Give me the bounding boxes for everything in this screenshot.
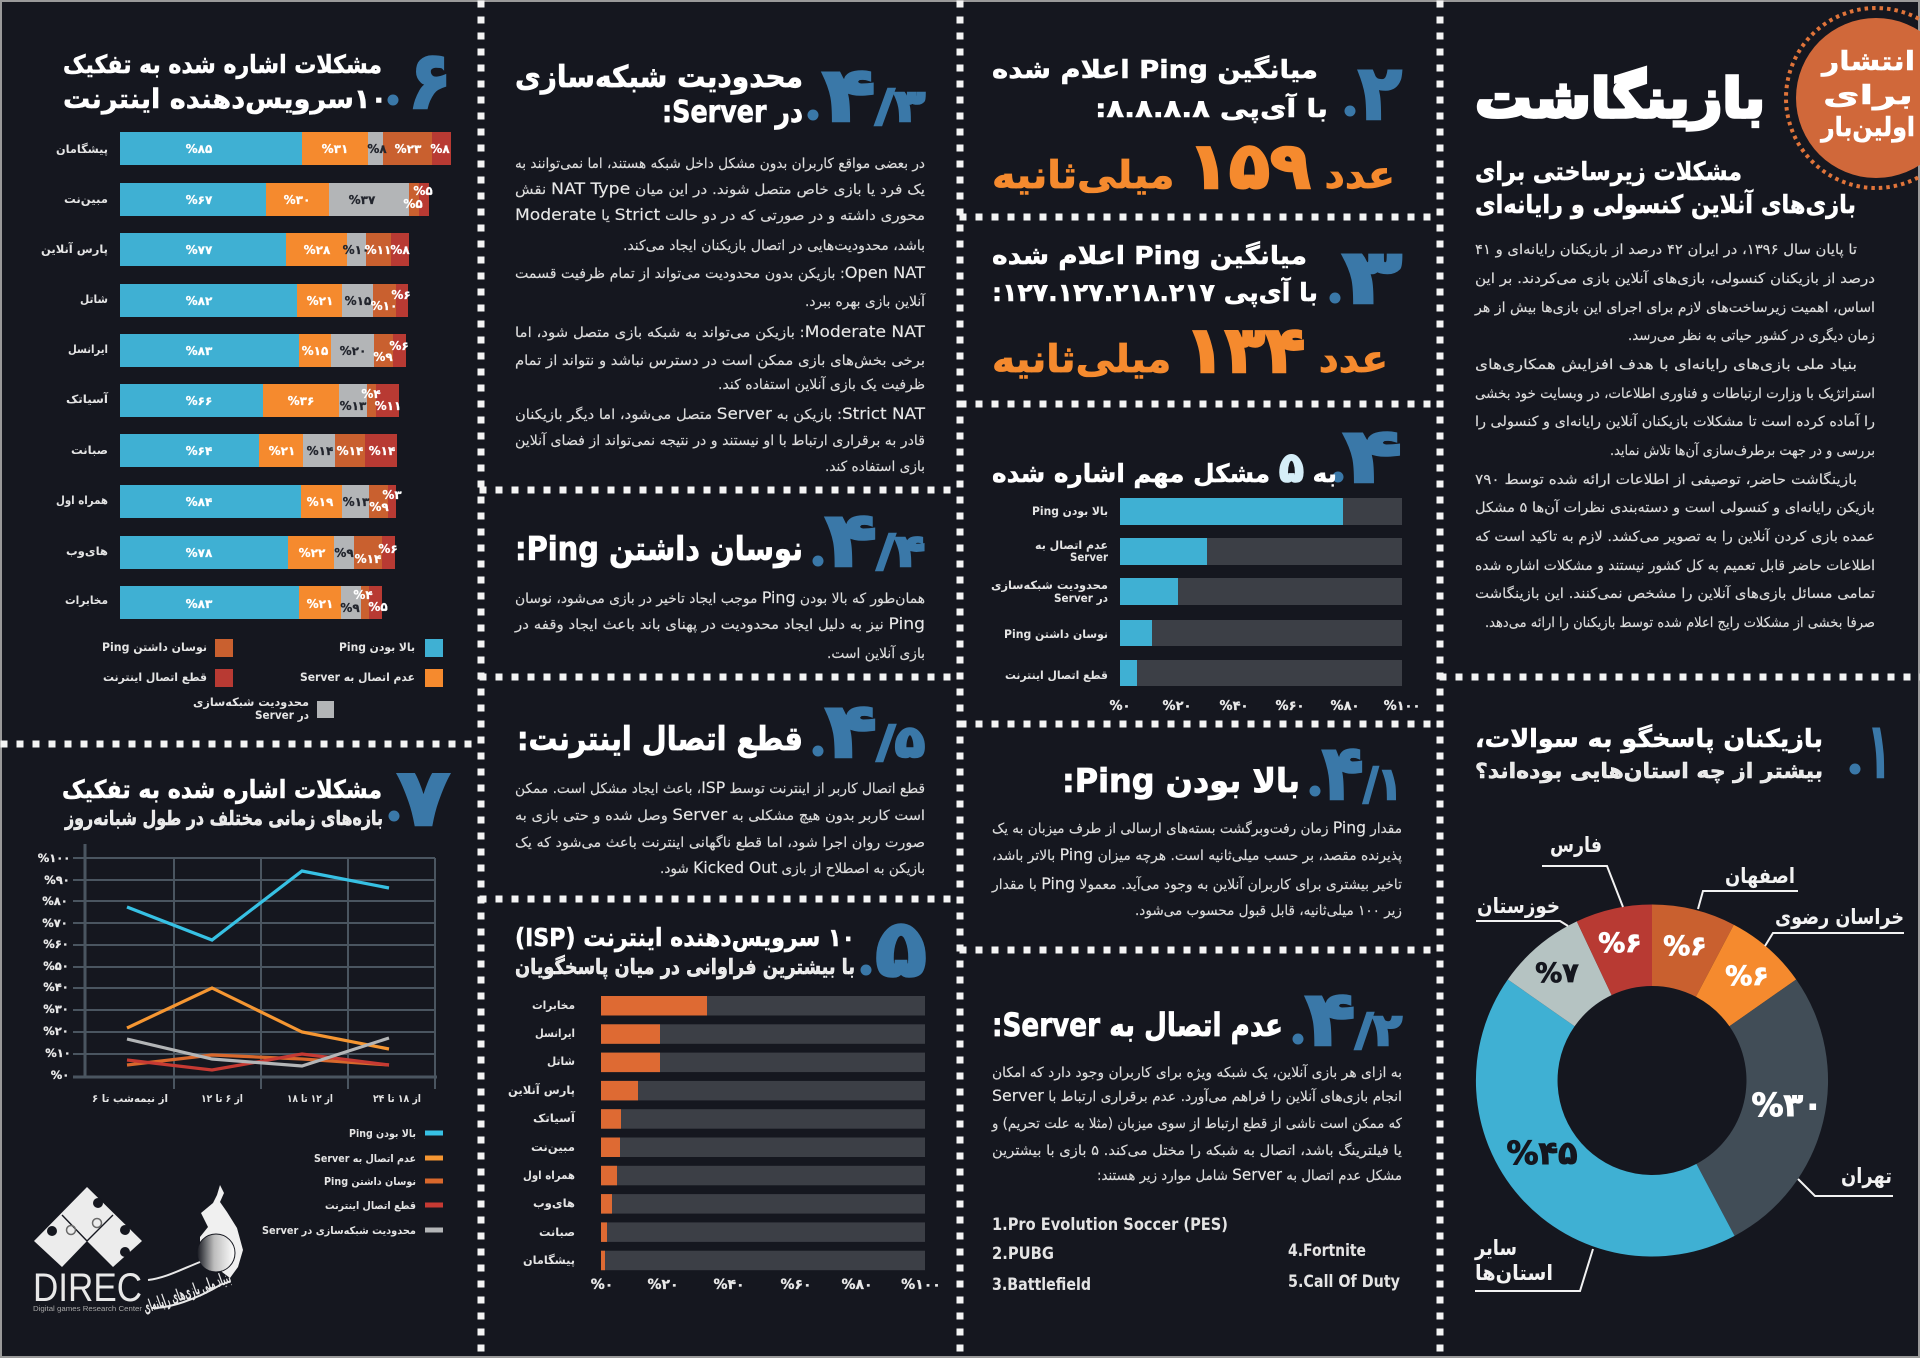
intro text bbox=[1474, 242, 1875, 631]
stacked bar chart: %۲۰ bbox=[340, 344, 366, 358]
stacked bar chart: %۶ bbox=[391, 288, 411, 302]
bar chart: five problems: %۲۰ bbox=[1163, 699, 1191, 714]
text 4.3 bbox=[515, 156, 926, 475]
text 4.2: که ممکن است ناشی از قطع ارتباط از سوی میزبان (مثلا به علت تحریم) و bbox=[991, 1116, 1402, 1132]
stacked bar chart: آسیاتک bbox=[66, 392, 109, 406]
bar chart: ISPs: %۱۰۰ bbox=[901, 1277, 941, 1293]
stacked bar chart: ایرانسل bbox=[68, 342, 108, 356]
stacked bar chart: مبین‌نت bbox=[64, 192, 108, 206]
number 4.5: ۴/۵ bbox=[825, 686, 925, 775]
text 4.5: قطع اتصال کاربر از اینترنت توسط ISP، باعث ایجاد مشکل است. ممکن bbox=[515, 778, 925, 797]
line chart: %۱۰ bbox=[45, 1046, 71, 1060]
intro text: استراتژیک با وزارت ارتباطات و فناوری اطلاعات، در وبسایت خود بخشی bbox=[1475, 386, 1875, 402]
panel: intro bbox=[1474, 8, 1920, 631]
stacked bar chart: مخابرات bbox=[65, 593, 108, 607]
panel: section 7 problems by time bbox=[33, 751, 450, 1318]
stacked bar chart: صبانت bbox=[71, 443, 108, 457]
legend: stacked bars: نوسان داشتن Ping bbox=[102, 640, 207, 655]
heading 6 bbox=[63, 50, 387, 115]
heading 1 bbox=[1475, 724, 1823, 783]
text 4.3: در بعضی مواقع کاربران بدون مشکل داخل شبکه هستند، اما نمی‌توانند به bbox=[515, 156, 925, 172]
label: Tehran: تهران bbox=[1841, 1164, 1892, 1188]
intro text: بازیکن رایانه‌ای و کنسولی است و دسته‌بندی نظرات آن‌ها ۵ مشکل bbox=[1475, 499, 1875, 516]
text 4.1: مقدار Ping زمان رفت‌وبرگشت بسته‌های ارسالی از طرف میزبان به یک bbox=[992, 818, 1402, 837]
bar chart: ISPs: پیشگامان bbox=[523, 1253, 575, 1267]
text 4.4: بازی آنلاین است. bbox=[827, 645, 925, 662]
subtitle: بازی‌های آنلاین کنسولی و رایانه‌ای bbox=[1475, 189, 1856, 220]
stacked bar chart: پارس آنلاین bbox=[41, 242, 108, 256]
donut chart: %۶ bbox=[1663, 931, 1707, 962]
stacked bar chart: پیشگامان bbox=[56, 142, 108, 156]
stacked bar chart: %۱۴ bbox=[369, 444, 395, 458]
label: other provinces: استان‌ها bbox=[1475, 1261, 1553, 1285]
donut chart: %۶ bbox=[1725, 961, 1769, 992]
stacked bar chart: %۱۹ bbox=[307, 495, 334, 509]
panel: section 1 provinces: ۱ bbox=[1868, 706, 1890, 795]
intro text: بازینگاشت حاضر، توصیفی از اطلاعات ارائه شده توسط ۷۹۰ bbox=[1475, 471, 1857, 488]
bar chart: five problems: %۰ bbox=[1110, 699, 1130, 714]
stacked bar chart: %۹ bbox=[334, 546, 354, 560]
panel: section 3 ping bbox=[992, 232, 1402, 388]
bar chart: five problems: Server bbox=[1070, 550, 1108, 564]
stacked bar chart: %۷۷ bbox=[186, 243, 213, 257]
text 4.3: ظرفیت یک بازی آنلاین استفاده کند. bbox=[718, 376, 925, 393]
panel: section 6 problems by ISP bbox=[41, 34, 452, 722]
number 4 bbox=[1332, 411, 1402, 500]
legend: stacked bars: محدودیت شبکه‌سازی bbox=[193, 695, 309, 710]
bar chart: ISPs bbox=[508, 996, 941, 1293]
intro text: تا پایان سال ۱۳۹۶، در ایران ۴۲ درصد از بازیکنان رایانه‌ای و ۴۱ bbox=[1475, 242, 1857, 258]
bar chart: ISPs: های‌وب bbox=[533, 1196, 575, 1211]
stacked bar chart: همراه اول bbox=[56, 493, 108, 508]
bar chart: five problems: نوسان داشتن Ping bbox=[1004, 627, 1108, 642]
text 4.2: انجام بازی‌های آنلاین را فراهم می‌آورد. عدم برقراری ارتباط با Server bbox=[992, 1086, 1402, 1105]
stacked bar chart: %۱۱ bbox=[365, 243, 391, 257]
label: Isfahan: اصفهان bbox=[1725, 864, 1795, 888]
stacked bar chart: %۱۴ bbox=[337, 444, 363, 458]
bar chart: five problems: قطع اتصال اینترنت bbox=[1005, 668, 1108, 682]
bar chart: ISPs: %۸۰ bbox=[841, 1277, 873, 1293]
text 4.5: بازیکن به اصطلاح از بازی Kicked Out شود. bbox=[660, 858, 925, 877]
stacked bar chart: %۳۶ bbox=[288, 394, 314, 408]
text 4.2: یا فیلترینگ باشد، اتصال به شبکه را مختل می‌کند. ۵ بازی با بیشترین bbox=[992, 1142, 1402, 1159]
number 4: ۴ bbox=[1343, 411, 1402, 500]
donut chart: %۷ bbox=[1535, 958, 1579, 989]
stacked bar chart: %۲۲ bbox=[299, 546, 326, 560]
heading 2 bbox=[992, 55, 1328, 123]
bar chart: ISPs: مبین‌نت bbox=[531, 1140, 575, 1154]
bar chart: five problems: %۱۰۰ bbox=[1384, 699, 1420, 714]
text 4.3: یک فرد یا بازی خاص متصل شوند. در این میان NAT Type نقش bbox=[515, 179, 925, 198]
legend: line chart: قطع اتصال اینترنت bbox=[325, 1200, 416, 1212]
badge: first publication bbox=[1786, 8, 1920, 188]
stacked bar chart: %۶ bbox=[378, 542, 398, 556]
bar chart: ISPs: پارس آنلاین bbox=[508, 1083, 575, 1097]
text 4.1 bbox=[991, 818, 1402, 919]
panel: section 4 problems bbox=[991, 411, 1420, 714]
panel: section 1 provinces bbox=[1474, 706, 1904, 1291]
bar chart: ISPs: صبانت bbox=[539, 1225, 575, 1239]
heading 7: مشکلات اشاره شده به تفکیک bbox=[62, 775, 382, 804]
stacked bar chart: %۶۷ bbox=[186, 193, 213, 207]
intro text: اساس، اهمیت زیرساخت‌های لازم برای اجرای این بازی‌ها بیش از هر bbox=[1474, 300, 1875, 316]
line chart: از نیمه‌شب تا ۶ bbox=[92, 1093, 168, 1105]
stacked bar chart: %۲۱ bbox=[307, 597, 333, 611]
title: بازینگاشت bbox=[1475, 67, 1765, 130]
stacked bar chart: %۴ bbox=[353, 588, 373, 602]
legend: line chart: محدودیت شبکه‌سازی در Server bbox=[262, 1225, 416, 1237]
stacked bar chart bbox=[41, 132, 451, 619]
number 4.2: ۴/۲ bbox=[1305, 974, 1402, 1063]
text 4.5: است کاربر بدون هیچ مشکلی به Server وصل شده و حتی بازی به bbox=[515, 805, 925, 824]
legend: stacked bars: در Server bbox=[255, 708, 309, 722]
stacked bar chart: %۸ bbox=[367, 142, 387, 156]
text 4.2: به ازای هر بازی آنلاین، یک شبکه ویژه برای کاربران وجود دارد که امکان bbox=[992, 1064, 1402, 1081]
intro text: اطلاعات حاضر قابل تعمیم به کل کشور نیستند و مشکلات اشاره شده bbox=[1475, 558, 1875, 574]
text 4.5: صورت روان اجرا شود، اما قطع ناگهانی اینترنت باعث می‌شود که یک bbox=[515, 834, 925, 851]
label: Fars: فارس bbox=[1550, 833, 1602, 857]
legend: stacked bars: بالا بودن Ping bbox=[339, 640, 415, 655]
stacked bar chart: %۱۴ bbox=[307, 444, 333, 458]
legend: stacked bars bbox=[102, 639, 443, 722]
legend: line chart: بالا بودن Ping bbox=[349, 1128, 416, 1140]
intro text: عمده بازی کردن آنلاین را به تصویر می‌کشد. لازم به تاکید است که bbox=[1475, 528, 1875, 545]
bar chart: five problems: در Server bbox=[1054, 591, 1108, 605]
donut chart bbox=[1476, 904, 1828, 1257]
label: Khuzestan: خوزستان bbox=[1477, 894, 1560, 918]
heading 5: با بیشترین فراوانی در میان پاسخگویان bbox=[515, 954, 855, 979]
heading 5 bbox=[515, 923, 855, 979]
bar chart: ISPs: مخابرات bbox=[532, 998, 575, 1012]
badge: first publication: انتشار bbox=[1820, 47, 1915, 77]
text 4.1: پذیرنده مقصد، بر حسب میلی‌ثانیه است. هرچه میزان Ping بالاتر باشد، bbox=[992, 845, 1402, 864]
game list bbox=[992, 1215, 1400, 1294]
bar chart: five problems: %۸۰ bbox=[1331, 699, 1359, 714]
game list: 4.Fortnite bbox=[1288, 1241, 1366, 1260]
stacked bar chart: %۶ bbox=[389, 339, 409, 353]
stacked bar chart: %۷۸ bbox=[186, 546, 213, 560]
text 4.3: قادر به برقراری ارتباط با او نیستند و در نتیجه نمی‌تواند از فضای آنلاین bbox=[515, 432, 925, 449]
stacked bar chart: %۳ bbox=[382, 488, 402, 502]
line chart: از ۱۲ تا ۱۸ bbox=[287, 1093, 333, 1105]
stacked bar chart: %۵ bbox=[368, 600, 388, 614]
stacked bar chart: %۲۱ bbox=[269, 444, 295, 458]
line chart: %۴۰ bbox=[43, 980, 69, 994]
stacked bar chart: %۶۶ bbox=[186, 394, 212, 408]
heading 4.1: بالا بودن Ping: bbox=[1062, 761, 1300, 801]
stacked bar chart: %۴ bbox=[361, 387, 381, 401]
text 4.3: Moderate NAT: بازیکن می‌تواند به شبکه بازی متصل شود، اما bbox=[515, 322, 925, 341]
panel: section 4.1 high ping bbox=[991, 728, 1402, 919]
panel: section 5 ISPs bbox=[508, 902, 941, 1293]
stacked bar chart: %۸ bbox=[390, 243, 410, 257]
stacked bar chart: %۱۰ bbox=[371, 299, 397, 313]
heading 7 bbox=[62, 775, 383, 830]
bar chart: ISPs: %۰ bbox=[591, 1277, 613, 1293]
stacked bar chart: %۲۱ bbox=[307, 294, 333, 308]
stacked bar chart: %۵ bbox=[413, 184, 433, 198]
intro text: درصد از بازیکنان کنسولی، بازی‌های آنلاین بازی می‌کردند. بر این bbox=[1475, 270, 1875, 287]
bar chart: five problems: بالا بودن Ping bbox=[1032, 504, 1108, 519]
stacked bar chart: %۱۳ bbox=[343, 495, 370, 509]
text 4.3: Strict NAT: بازیکن به Server متصل می‌شود، اما دیگر بازیکنان bbox=[515, 404, 925, 423]
heading 3 bbox=[992, 241, 1318, 307]
text 4.3: آنلاین بازی بهره ببرد. bbox=[805, 293, 926, 310]
stacked bar chart: %۳۱ bbox=[322, 142, 348, 156]
stacked bar chart: %۸ bbox=[430, 142, 450, 156]
line chart: %۷۰ bbox=[42, 916, 68, 930]
bar chart: five problems: %۶۰ bbox=[1276, 699, 1304, 714]
stacked bar chart: %۳۷ bbox=[349, 193, 376, 207]
subtitle bbox=[1475, 157, 1856, 220]
stacked bar chart: %۱۱ bbox=[375, 399, 401, 413]
heading 3: میانگین Ping اعلام شده bbox=[992, 241, 1307, 271]
game list: 1.Pro Evolution Soccer (PES) bbox=[992, 1215, 1228, 1234]
panel: section 2 ping bbox=[992, 48, 1402, 204]
text 4.3: بازی استفاده کند. bbox=[825, 459, 925, 475]
heading 4.3: در Server: bbox=[662, 95, 803, 130]
value 159 ms: عدد ۱۵۹ میلی‌ثانیه bbox=[992, 130, 1395, 204]
number 4.4: ۴/۴ bbox=[825, 495, 925, 584]
stacked bar chart: %۹ bbox=[340, 601, 360, 615]
stacked bar chart: %۱۴ bbox=[355, 552, 381, 566]
number 3 bbox=[1330, 232, 1402, 321]
game list: 3.Battlefield bbox=[992, 1275, 1091, 1294]
panel: section 4.2 server connection bbox=[991, 974, 1402, 1294]
stacked bar chart: %۵ bbox=[403, 197, 423, 211]
bar chart: ISPs: شاتل bbox=[547, 1054, 575, 1068]
text 4.3: باشد، محدودیت‌هایی در اتصال بازیکنان ایجاد می‌کند. bbox=[623, 238, 925, 254]
panel: section 4.5 internet loss bbox=[515, 686, 925, 877]
game list: 5.Call Of Duty bbox=[1288, 1272, 1400, 1291]
line chart bbox=[38, 844, 437, 1105]
legend: line chart: عدم اتصال به Server bbox=[314, 1153, 416, 1165]
game list: 2.PUBG bbox=[992, 1244, 1054, 1263]
stacked bar chart: شاتل bbox=[80, 292, 108, 306]
heading 4.3 bbox=[515, 60, 803, 130]
bar chart: ISPs: %۴۰ bbox=[713, 1277, 745, 1293]
label: other provinces bbox=[1474, 1236, 1593, 1291]
line chart: از ۱۸ تا ۲۴ bbox=[373, 1093, 421, 1105]
stacked bar chart: %۸۳ bbox=[186, 597, 213, 611]
label: Fars bbox=[1542, 833, 1623, 907]
legend: line chart bbox=[262, 1128, 443, 1237]
donut chart: %۶ bbox=[1598, 928, 1642, 959]
number 6: ۶ bbox=[408, 34, 452, 127]
bar chart: ISPs: %۶۰ bbox=[780, 1277, 812, 1293]
bar chart: five problems: %۴۰ bbox=[1220, 699, 1248, 714]
heading 7: بازه‌های زمانی مختلف در طول شبانه‌روز bbox=[64, 806, 383, 830]
stacked bar chart: %۱۵ bbox=[345, 294, 371, 308]
line chart: %۵۰ bbox=[43, 959, 69, 973]
line chart: %۹۰ bbox=[44, 873, 70, 887]
heading 6: مشکلات اشاره شده به تفکیک bbox=[63, 50, 382, 79]
number 4.3: ۴/۳ bbox=[822, 50, 925, 139]
line chart: %۱۰۰ bbox=[38, 851, 70, 865]
heading 4.2: عدم اتصال به Server: bbox=[992, 1006, 1283, 1044]
number 2: ۲ bbox=[1358, 48, 1402, 137]
donut chart: %۴۵ bbox=[1506, 1134, 1578, 1172]
heading 2: میانگین Ping اعلام شده bbox=[992, 55, 1318, 85]
heading 4.5: قطع اتصال اینترنت: bbox=[517, 719, 803, 759]
text 4.1: زیر ۱۰۰ میلی‌ثانیه، قابل قبول محسوب می‌شود. bbox=[1135, 903, 1402, 919]
legend: stacked bars: عدم اتصال به Server bbox=[300, 670, 415, 684]
stacked bar chart: های‌وب bbox=[66, 544, 108, 559]
panel: section 4.4 ping fluctuation bbox=[514, 495, 925, 662]
bar chart: ISPs: ایرانسل bbox=[535, 1026, 575, 1040]
stacked bar chart: %۹ bbox=[373, 350, 393, 364]
stacked bar chart: %۸۳ bbox=[186, 344, 213, 358]
text 4.5 bbox=[515, 778, 925, 877]
label: Isfahan bbox=[1698, 864, 1798, 909]
value 134 ms: عدد ۱۳۴ میلی‌ثانیه bbox=[992, 314, 1388, 388]
line chart: %۰ bbox=[51, 1068, 69, 1082]
number 6 bbox=[388, 34, 452, 127]
number 3: ۳ bbox=[1342, 232, 1402, 321]
stacked bar chart: %۳۰ bbox=[284, 193, 310, 207]
intro text: زمان دیگری در کشور حیاتی به نظر می‌رسد. bbox=[1628, 327, 1875, 344]
intro text: تمامی مسائل بازی‌های آنلاین را مشخص نمی‌کنند. این بازینگاشت bbox=[1475, 585, 1875, 602]
line chart: %۲۰ bbox=[43, 1024, 69, 1038]
bar chart: ISPs: %۲۰ bbox=[647, 1277, 679, 1293]
label: Tehran bbox=[1798, 1164, 1893, 1196]
heading 4.4: نوسان داشتن Ping: bbox=[515, 529, 803, 569]
intro text: صرفا بخشی از مشکلات رایج اعلام شده توسط بازیکنان را ارائه می‌دهد. bbox=[1485, 615, 1875, 631]
stacked bar chart: %۱۰ bbox=[343, 243, 369, 257]
bar chart: five problems: عدم اتصال به bbox=[1035, 538, 1108, 552]
panel: section 4.3 NAT bbox=[515, 50, 926, 475]
text 4.2 bbox=[991, 1064, 1402, 1184]
heading 5: ۱۰ سرویس‌دهنده اینترنت (ISP) bbox=[515, 923, 855, 953]
line chart: از ۶ تا ۱۲ bbox=[201, 1093, 243, 1105]
number 7: ۷ bbox=[397, 751, 450, 844]
donut chart: %۳۰ bbox=[1751, 1086, 1823, 1124]
stacked bar chart: %۱۵ bbox=[302, 344, 328, 358]
text 4.1: تاخیر بیشتری برای کاربران آنلاین به وجود می‌آید. معمولا Ping با مقدار bbox=[991, 874, 1402, 893]
label: other provinces: سایر bbox=[1474, 1236, 1517, 1260]
text 4.4: Ping نیز به دلیل ایجاد محدودیت در پهنای باند باعث ایجاد وقفه در bbox=[514, 614, 925, 633]
logo: national games foundation bbox=[140, 1185, 243, 1318]
heading 4: به ۵ مشکل مهم اشاره شده bbox=[992, 443, 1337, 492]
text 4.3: محوری داشته و در صورتی که در دو حالت Strict یا Moderate bbox=[515, 205, 925, 224]
heading 3: با آی‌پی ۱۲۷.۱۲۷.۲۱۸.۲۱۷: bbox=[992, 277, 1318, 307]
heading 2: با آی‌پی ۸.۸.۸.۸: bbox=[1095, 93, 1328, 123]
intro text: بنیاد ملی بازی‌های رایانه‌ای با هدف افزایش همکاری‌های bbox=[1475, 357, 1857, 373]
logo: DIREC: DIREC bbox=[33, 1266, 142, 1310]
heading 1: بازیکنان پاسخگو به سوالات، bbox=[1475, 724, 1823, 754]
logo: DIREC bbox=[33, 1187, 143, 1313]
stacked bar chart: %۸۵ bbox=[186, 142, 212, 156]
line chart: %۶۰ bbox=[43, 937, 69, 951]
intro text: را آماده کرده است تا مشکلات بازیکنان آنلاین رایانه‌ای و کنسولی را bbox=[1475, 413, 1875, 430]
bar chart: five problems: محدودیت شبکه‌سازی bbox=[991, 578, 1108, 593]
stacked bar chart: %۹ bbox=[369, 500, 389, 514]
subtitle: مشکلات زیرساختی برای bbox=[1475, 157, 1742, 187]
text 4.4: همان‌طور که بالا بودن Ping موجب ایجاد تاخیر در بازی می‌شود، نوسان bbox=[515, 588, 925, 607]
stacked bar chart: %۲۳ bbox=[395, 142, 422, 156]
bar chart: ISPs: آسیاتک bbox=[533, 1111, 576, 1125]
text 4.3: Open NAT: بازیکن بدون محدودیت می‌تواند از تمام ظرفیت قسمت bbox=[515, 263, 925, 282]
number 5: ۵ bbox=[875, 902, 927, 995]
panel: section 7 problems by time: بنیاد ملی بازی‌های رایانه‌ای bbox=[140, 1268, 234, 1318]
line chart: %۳۰ bbox=[43, 1002, 69, 1016]
logo: DIREC: Digital games Research Center bbox=[33, 1306, 143, 1313]
label: Khorasan Razavi bbox=[1765, 905, 1904, 946]
text 4.3: برخی بخش‌های بازی ممکن است در دسترس نباشد و نتواند از تمام bbox=[515, 353, 925, 369]
bar chart: five problems bbox=[991, 498, 1420, 714]
number 4.1: ۴/۱ bbox=[1322, 728, 1402, 817]
heading 4.3: محدودیت شبکه‌سازی bbox=[515, 60, 803, 95]
text 4.2: مشکل عدم اتصال به Server شامل موارد زیر هستند: bbox=[1097, 1165, 1402, 1184]
legend: stacked bars: قطع اتصال اینترنت bbox=[103, 670, 207, 684]
stacked bar chart: %۸۴ bbox=[186, 495, 212, 509]
stacked bar chart: %۲۸ bbox=[304, 243, 331, 257]
number 1 bbox=[1850, 706, 1890, 795]
intro text: بررسی و در جهت برطرف‌سازی آن‌ها تلاش نماید. bbox=[1610, 442, 1875, 459]
legend: line chart: نوسان داشتن Ping bbox=[324, 1176, 416, 1188]
stacked bar chart: %۶۴ bbox=[186, 444, 212, 458]
badge: first publication: برای bbox=[1823, 81, 1913, 111]
heading 6: ۱۰سرویس‌دهنده اینترنت bbox=[63, 84, 387, 115]
stacked bar chart: %۸۲ bbox=[186, 294, 213, 308]
stacked bar chart: %۱۳ bbox=[340, 399, 367, 413]
line chart: %۸۰ bbox=[42, 894, 68, 908]
heading 1: بیشتر از چه استان‌هایی بوده‌اند؟ bbox=[1475, 759, 1823, 783]
bar chart: ISPs: همراه اول bbox=[523, 1168, 575, 1183]
text 4.4 bbox=[514, 588, 925, 662]
